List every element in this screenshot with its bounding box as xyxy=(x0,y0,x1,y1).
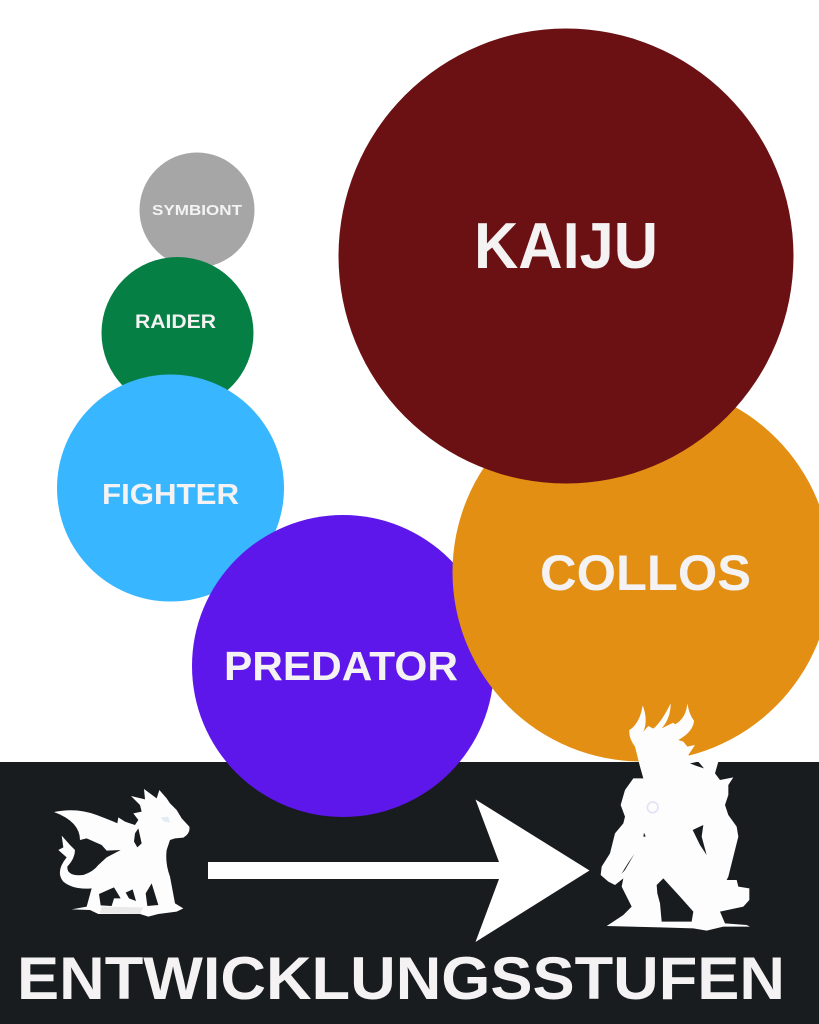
arrow: growth direction xyxy=(208,800,590,942)
circle: Kaiju stage xyxy=(338,28,794,484)
icon: small dragon silhouette xyxy=(54,789,190,917)
circle: Predator stage: PREDATOR xyxy=(224,643,458,689)
circle: Symbiont stage xyxy=(140,152,254,268)
circle: Fighter stage xyxy=(57,374,284,602)
circle: Raider stage: RAIDER xyxy=(135,312,216,333)
title: ENTWICKLUNGSSTUFEN xyxy=(17,945,785,1012)
circle: Collos stage: COLLOS xyxy=(540,545,751,601)
circle: Collos stage xyxy=(452,382,819,762)
circle: Fighter stage: FIGHTER xyxy=(102,479,239,511)
icon: large kaiju silhouette xyxy=(601,703,750,931)
circle: Raider stage xyxy=(102,257,254,409)
circle: Predator stage xyxy=(192,515,494,817)
circle: Symbiont stage: SYMBIONT xyxy=(152,202,242,219)
dark footer band xyxy=(0,762,819,1024)
circle: Kaiju stage: KAIJU xyxy=(474,209,658,282)
